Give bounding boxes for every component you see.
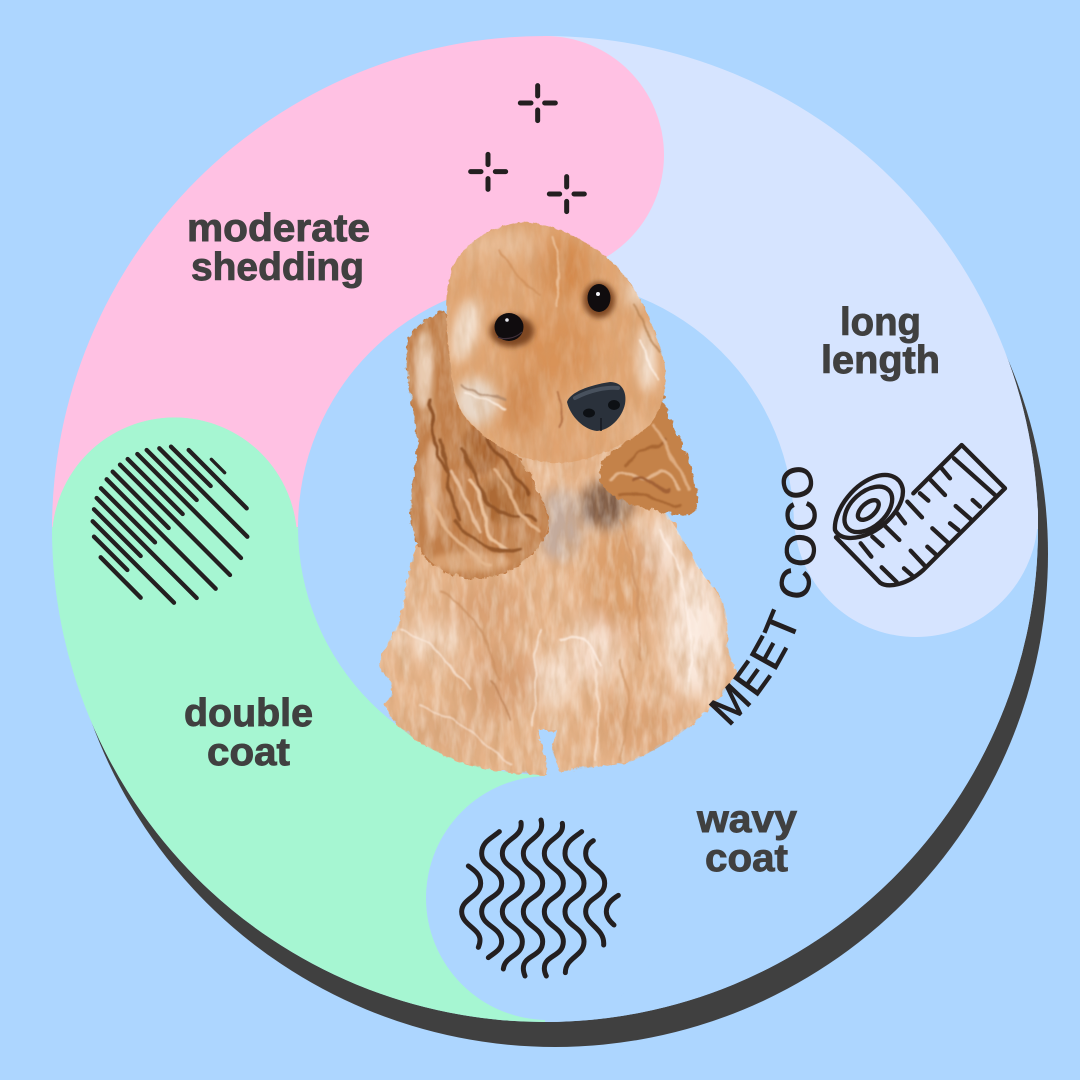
body shading (370, 440, 750, 780)
heading: moderate shedding: shedding (191, 246, 364, 289)
heading: double coat: double (184, 692, 313, 735)
face shading (446, 222, 665, 462)
heading: long length: length (821, 339, 940, 382)
panel: long length segment (545, 36, 1038, 529)
eyes (494, 284, 610, 341)
panel: double coat segment (52, 417, 545, 1022)
heading: wavy coat: coat (705, 837, 788, 880)
left ear shading (406, 312, 548, 578)
left ear curls (430, 400, 540, 565)
panel: long length end cap (794, 393, 1038, 637)
icon: wavy hair lines (462, 820, 618, 976)
photo: Coco the spaniel (370, 215, 750, 780)
nose (567, 382, 625, 431)
body fur strands (400, 520, 691, 765)
dog body fur (380, 440, 737, 775)
inner circle (298, 279, 794, 775)
panel: wavy coat end cap (426, 776, 670, 1020)
heading: wavy coat: wavy (696, 798, 797, 841)
right ear (600, 385, 698, 515)
heading: moderate shedding: moderate (187, 207, 370, 250)
icon: straight hair lines (93, 447, 247, 603)
right ear curls (610, 425, 688, 505)
icon: sparkles (471, 86, 584, 212)
panel: wavy coat segment (545, 529, 1038, 1022)
curved title: MEET COCO: MEET COCO (708, 467, 817, 726)
heading: double coat: coat (207, 731, 290, 774)
panel: moderate shedding segment (52, 36, 664, 529)
heading: long length: long (840, 301, 921, 344)
green cap restored over inner edge (52, 417, 298, 540)
face fur strands (462, 238, 660, 425)
icon: measuring tape (835, 445, 1005, 585)
left ear (407, 312, 549, 579)
head (446, 222, 665, 463)
eye brown surrounds (490, 282, 615, 347)
